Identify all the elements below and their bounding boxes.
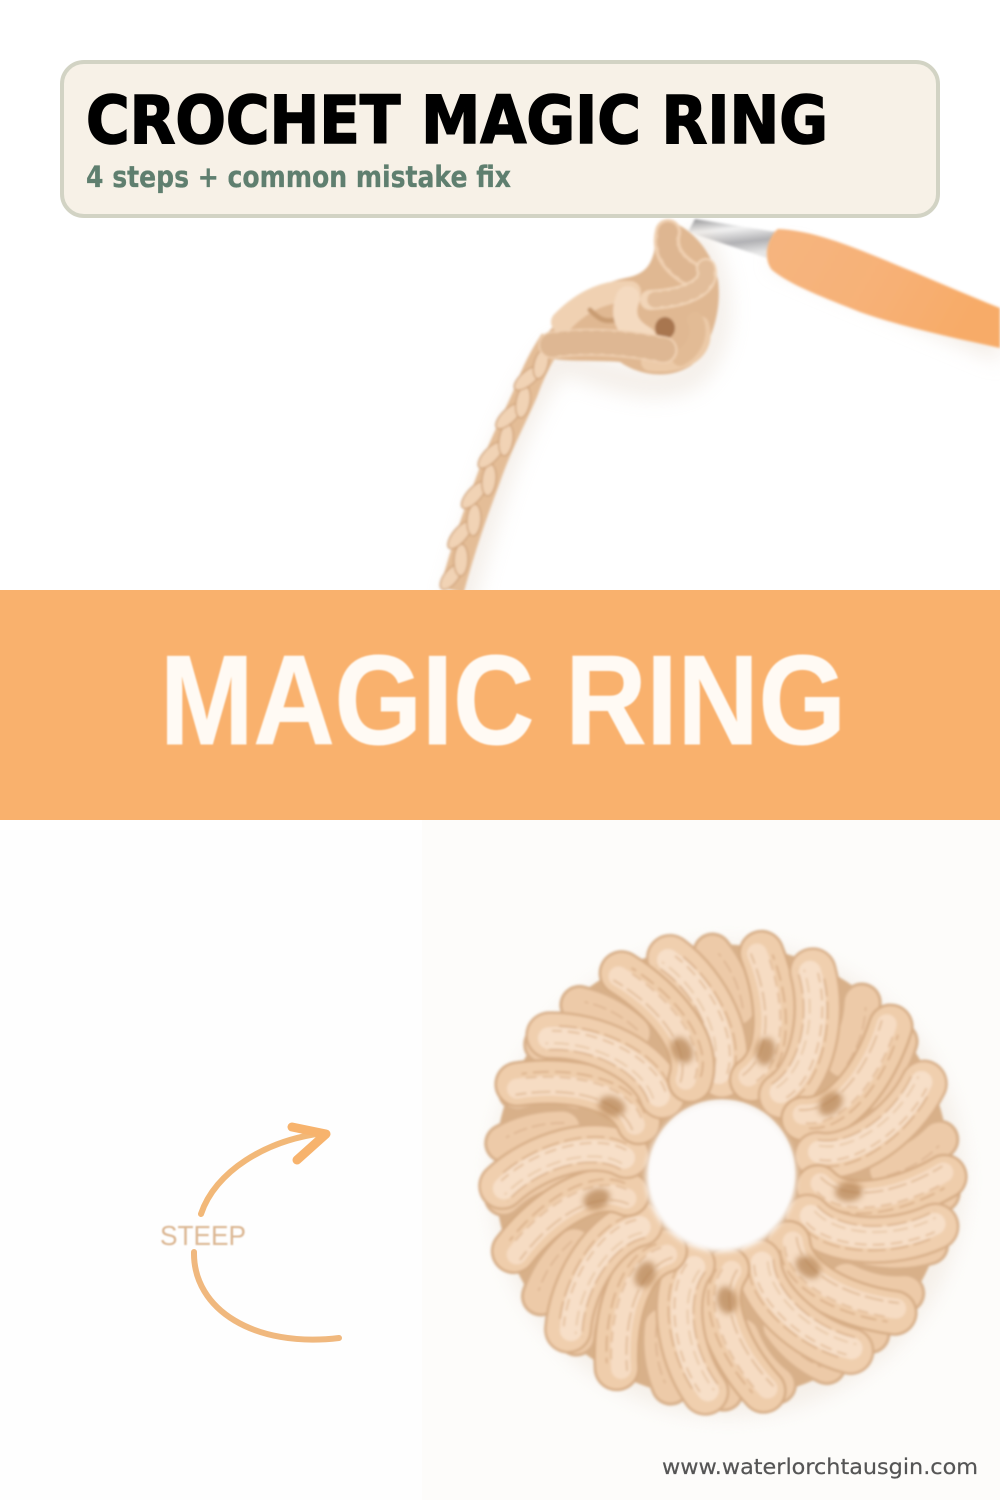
subtitle: 4 steps + common mistake fix — [86, 160, 511, 194]
outer strands — [504, 953, 941, 1392]
ring centre hole — [646, 1102, 796, 1252]
watermark url: www.waterlorchtausgin.com — [662, 1455, 978, 1479]
dark stitch gaps — [580, 1033, 863, 1316]
title: CROCHET MAGIC RING — [86, 82, 828, 159]
photo: yarn tail and slip knot — [436, 222, 719, 598]
photo: finished yarn ring — [492, 944, 964, 1416]
yarn strands — [496, 948, 948, 1400]
circular arrow with label — [160, 1127, 339, 1340]
banner text: MAGIC RING — [160, 629, 846, 771]
knot loops — [552, 232, 707, 363]
yarn tail — [436, 340, 552, 593]
orange banner — [0, 590, 1000, 820]
arrow label: STEEP — [160, 1220, 246, 1251]
hook metal shaft — [688, 219, 776, 258]
arrow lower arc — [194, 1252, 339, 1340]
photo: crochet hook — [688, 219, 1000, 362]
title card — [62, 62, 938, 216]
arrow upper arc — [201, 1127, 326, 1214]
knot body — [546, 222, 719, 375]
hook orange handle — [767, 229, 1000, 348]
